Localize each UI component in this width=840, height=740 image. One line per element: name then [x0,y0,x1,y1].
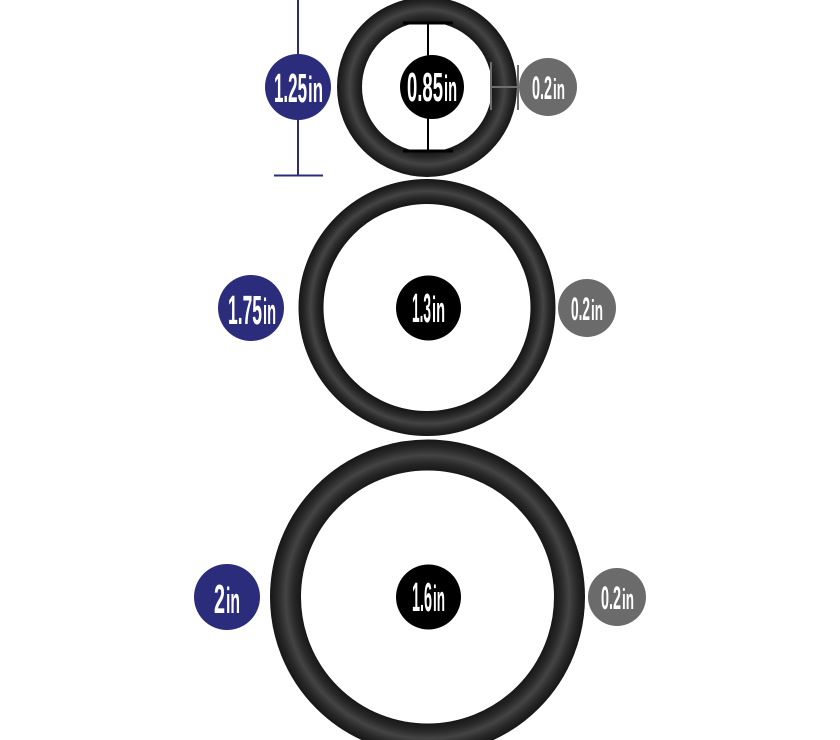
badge: thickness 0.2in large ring: in [622,584,634,616]
ring: large [286,455,570,739]
badge: outer diameter 2in: in [226,580,240,621]
badge: inner diameter 1.3in [396,276,461,340]
badge: thickness 0.2in small ring: in [553,74,565,106]
badge: inner diameter 0.85in: 0.85 [407,64,443,110]
badge: outer diameter 1.25in: in [308,69,323,110]
badge: outer diameter 2in: 2 [214,576,225,622]
badge: thickness 0.2in medium ring: 0.2 [571,291,590,327]
badge: inner diameter 1.6in: 1.6 [412,574,432,620]
badge: thickness 0.2in large ring: 0.2 [601,580,621,616]
badge: inner diameter 1.6in [396,564,461,630]
badge: inner diameter 1.6in: in [433,578,445,619]
badge: inner diameter 1.3in: in [432,289,445,330]
badge: outer diameter 1.25in [265,54,331,120]
thickness marker: small ring [491,62,518,110]
badge: thickness 0.2in medium ring [558,279,616,337]
badge: inner diameter 0.85in [400,55,464,119]
badge: outer diameter 1.75in: in [263,291,276,332]
badge: inner diameter 1.3in: 1.3 [412,285,431,331]
inner diameter marker: small ring [403,23,453,151]
badge: thickness 0.2in large ring [588,568,646,626]
badge: inner diameter 0.85in: in [444,68,457,109]
badge: outer diameter 1.75in: 1.75 [228,287,262,333]
badge: thickness 0.2in small ring: 0.2 [532,70,552,106]
badge: outer diameter 1.75in [218,275,284,341]
badge: thickness 0.2in small ring [519,58,577,116]
badge: outer diameter 2in [194,564,260,630]
badge: thickness 0.2in medium ring: in [591,295,603,327]
ring: small [350,10,504,164]
ring: medium [311,192,543,424]
badge: outer diameter 1.25in: 1.25 [274,65,307,111]
outer diameter marker: small ring [274,0,323,176]
